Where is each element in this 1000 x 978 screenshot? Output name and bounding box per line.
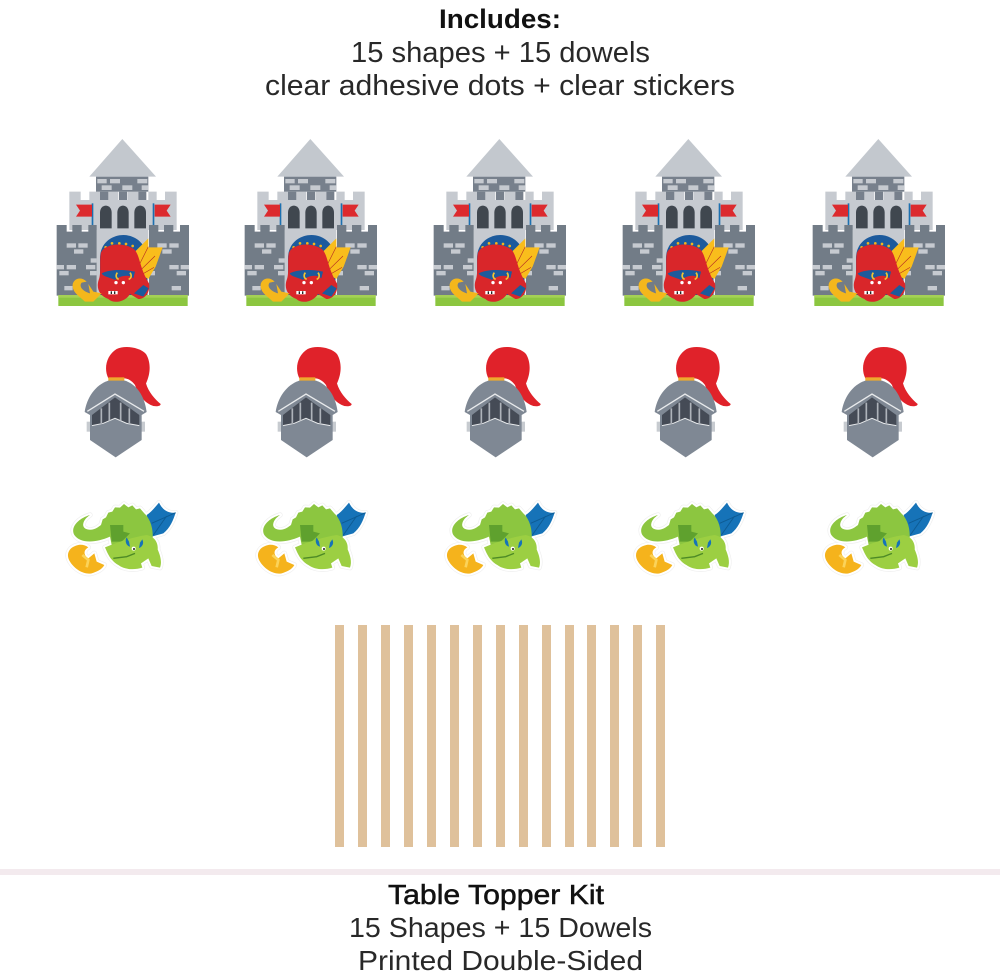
text: printed double-sided: Printed Double-Sided <box>358 945 643 976</box>
text: adhesive dots and stickers: clear adhesive dots + clear stickers <box>265 70 735 102</box>
heading: includes: Includes: <box>439 4 561 34</box>
wooden dowels <box>335 625 665 847</box>
row of knight helmet shapes <box>85 347 918 457</box>
row of castle shapes <box>57 139 945 306</box>
text: shapes and dowels count: 15 shapes + 15 dowels <box>351 37 650 69</box>
heading: table topper kit: Table Topper Kit <box>388 879 604 910</box>
row of green dragon shapes <box>68 503 933 574</box>
text: shapes and dowels: 15 Shapes + 15 Dowels <box>349 912 652 943</box>
